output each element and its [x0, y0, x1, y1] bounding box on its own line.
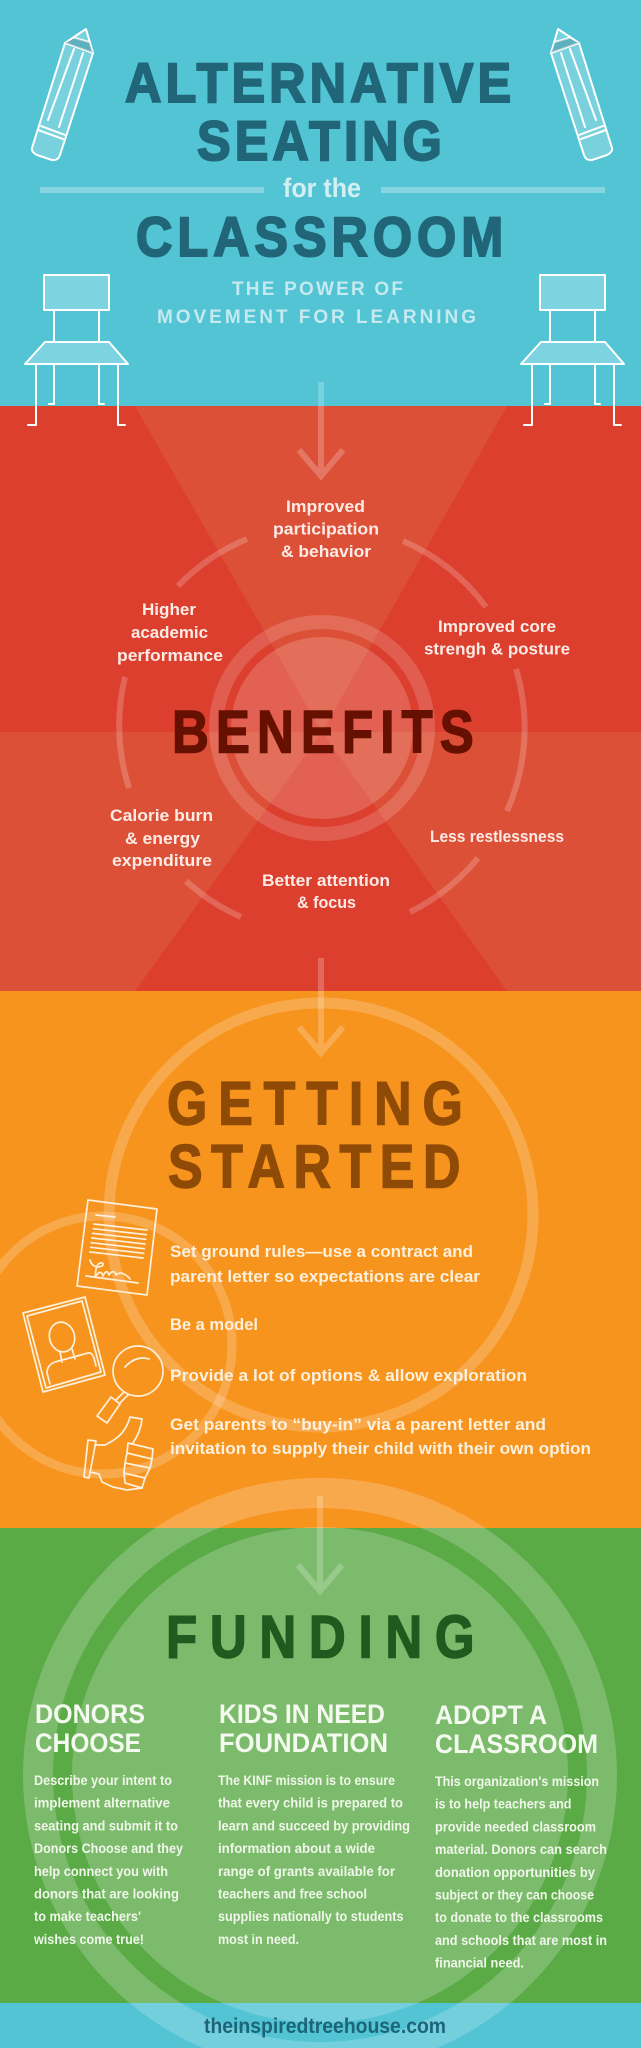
- benefit: attention: Better attention: [262, 871, 390, 890]
- benefit: core strength: strengh & posture: [424, 640, 570, 658]
- kids in need body: that every child is prepared to: [218, 1796, 403, 1811]
- benefit: academic performance: Higher: [142, 600, 196, 619]
- kids in need body: information about a wide: [218, 1841, 375, 1856]
- title: alternative seating: [125, 53, 511, 173]
- steps list: invitation to supply their child with their own option: [170, 1439, 591, 1458]
- adopt a classroom body: material. Donors can search: [435, 1842, 607, 1857]
- benefit: academic performance: [117, 600, 223, 665]
- footer url: theinspiredtreehouse.com: [204, 2015, 446, 2038]
- panel: header: [0, 0, 641, 476]
- footer bar: [0, 2003, 641, 2048]
- steps list: Set ground rules—use a contract and: [170, 1242, 473, 1261]
- benefit: core strength: [424, 617, 570, 658]
- benefit: participation: [273, 497, 379, 561]
- adopt a classroom body: financial need.: [435, 1956, 524, 1971]
- donors choose body: Describe your intent to: [34, 1773, 172, 1788]
- adopt a classroom body: is to help teachers and: [435, 1797, 572, 1812]
- benefit: participation: participation: [273, 520, 379, 538]
- arrow: header to benefits: [299, 382, 343, 476]
- benefit: calorie burn: & energy: [125, 829, 201, 848]
- adopt a classroom heading: [435, 1700, 598, 1759]
- panel: funding: [0, 1478, 641, 2048]
- benefit: calorie burn: expenditure: [112, 851, 212, 870]
- heading: funding: FUNDING: [166, 1604, 475, 1670]
- subtitle: THE POWER OF: [232, 279, 403, 300]
- icon: right pencil: [551, 29, 612, 160]
- steps list: parent letter so expectations are clear: [170, 1267, 480, 1286]
- subtitle: MOVEMENT FOR LEARNING: [157, 307, 476, 328]
- adopt a classroom body: and schools that are most in: [435, 1933, 607, 1948]
- benefit: calorie burn: Calorie burn: [110, 806, 213, 825]
- column: kids in need foundation: [218, 1699, 410, 1947]
- icon: right chair: [521, 275, 624, 425]
- heading: getting started: STARTED: [168, 1133, 460, 1200]
- center circle: [209, 615, 435, 841]
- title: alternative seating: ALTERNATIVE: [125, 53, 511, 115]
- benefit: calorie burn: [110, 806, 213, 870]
- adopt a classroom body: [435, 1774, 607, 1971]
- donors choose body: to make teachers': [34, 1909, 141, 1924]
- kids in need heading: FOUNDATION: [219, 1728, 388, 1758]
- benefit: participation: Improved: [286, 497, 365, 516]
- icon: left pencil: [32, 29, 93, 160]
- heading: benefits: BENEFITS: [172, 699, 474, 765]
- benefit: attention: & focus: [297, 893, 356, 912]
- title: alternative seating: SEATING: [197, 111, 442, 173]
- adopt a classroom body: subject or they can choose: [435, 1888, 594, 1902]
- benefit: participation: & behavior: [281, 542, 371, 561]
- donors choose body: wishes come true!: [33, 1932, 144, 1947]
- benefit: less restlessness: Less restlessness: [430, 827, 564, 846]
- benefit: academic performance: performance: [117, 646, 223, 665]
- kids in need heading: [219, 1699, 388, 1758]
- background ring and disc: [23, 1478, 617, 2048]
- heading: getting started: GETTING: [167, 1070, 463, 1137]
- title: classroom: CLASSROOM: [136, 207, 503, 269]
- kids in need body: learn and succeed by providing: [218, 1818, 410, 1833]
- donors choose body: Donors Choose and they: [34, 1841, 183, 1856]
- icon: thumbs up: [84, 1417, 153, 1490]
- kids in need body: teachers and free school: [218, 1886, 367, 1902]
- adopt a classroom body: This organization's mission: [435, 1774, 599, 1789]
- adopt a classroom heading: CLASSROOM: [435, 1729, 598, 1759]
- panel: getting started: [0, 958, 641, 1528]
- heading: getting started: [167, 1070, 463, 1200]
- column: adopt a classroom: [435, 1700, 607, 1971]
- donors choose body: donors that are looking: [34, 1886, 179, 1902]
- adopt a classroom body: provide needed classroom: [435, 1819, 596, 1834]
- steps list: Get parents to “buy-in” via a parent letter and: [170, 1415, 546, 1434]
- benefit: core strength: Improved core: [438, 617, 556, 636]
- segmented outer ring: [119, 539, 525, 917]
- kids in need heading: KIDS IN NEED: [219, 1699, 385, 1729]
- steps list: Be a model: [170, 1315, 258, 1334]
- steps list: [170, 1242, 591, 1458]
- kids in need body: The KINF mission is to ensure: [218, 1773, 395, 1788]
- divider with for the: [40, 173, 605, 203]
- kids in need body: most in need.: [218, 1932, 299, 1947]
- adopt a classroom body: to donate to the classrooms: [435, 1910, 603, 1925]
- icon: magnifying glass: [97, 1346, 163, 1423]
- kids in need body: supplies nationally to students: [218, 1909, 404, 1924]
- donors choose body: seating and submit it to: [34, 1818, 178, 1833]
- donors choose heading: DONORS: [35, 1699, 145, 1729]
- background wedges: [0, 406, 641, 991]
- divider with for the: for the: [283, 173, 361, 203]
- adopt a classroom body: donation opportunities by: [435, 1865, 595, 1880]
- benefit: academic performance: academic: [131, 623, 208, 642]
- arrow: benefits to getting started: [299, 958, 343, 1053]
- arrow: getting started to funding: [298, 1496, 342, 1591]
- panel: benefits: [0, 406, 641, 991]
- donors choose heading: [35, 1699, 145, 1758]
- icon: contract document: [77, 1200, 157, 1295]
- adopt a classroom heading: ADOPT A: [435, 1700, 547, 1730]
- steps list: Provide a lot of options & allow exploration: [170, 1366, 527, 1385]
- donors choose body: [33, 1773, 183, 1947]
- column: donors choose: [33, 1699, 183, 1947]
- donors choose heading: CHOOSE: [35, 1728, 141, 1758]
- benefit: attention: [262, 871, 390, 912]
- icon: left chair: [25, 275, 128, 425]
- background rings: [0, 1003, 533, 1474]
- donors choose body: implement alternative: [34, 1796, 170, 1811]
- donors choose body: help connect you with: [34, 1864, 168, 1879]
- icon: portrait: [23, 1297, 105, 1392]
- subtitle: [157, 279, 476, 328]
- kids in need body: range of grants available for: [218, 1864, 396, 1879]
- kids in need body: [218, 1773, 410, 1947]
